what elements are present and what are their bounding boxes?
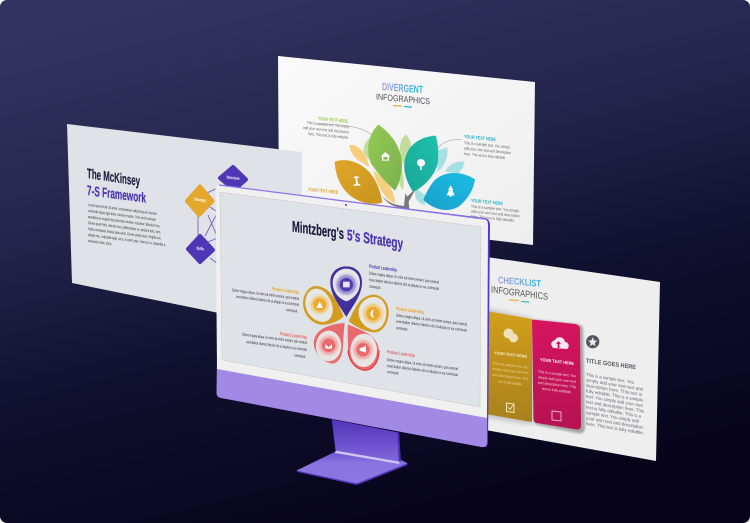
text block: right top: add your own text and description (464, 146, 511, 155)
petal: orange right (349, 295, 389, 332)
monitor bezel (216, 185, 488, 418)
text block: sample description: text. You simply add your own (586, 394, 643, 408)
heading: Mintzberg's 5's Strategy (292, 219, 403, 253)
icon: Structure diamond: Structure (226, 175, 240, 181)
text block: purple leadership (369, 264, 439, 291)
text block: red right leadership (387, 349, 458, 377)
framework connector lines (198, 186, 222, 267)
heading: The McKinsey 7-S Framework: The McKinsey (87, 165, 140, 189)
text block: right top: This is a sample text. You simply (464, 140, 510, 150)
heading: checklist infographics: INFOGRAPHICS (491, 285, 548, 303)
icon: checked box (506, 403, 514, 412)
text block: description: Donec quam felis, ultricies nec, pellentesque eu, pretium quis, sem. (88, 220, 161, 234)
monitor stand (297, 419, 407, 485)
heading: checklist infographics: CHECKLIST (498, 275, 541, 290)
text block: right bottom: add your own text and description (471, 209, 520, 218)
heading: checklist infographics (491, 275, 548, 303)
stand foot (297, 452, 407, 484)
text block: description (88, 202, 166, 247)
text block: red left leadership: Dolore magna aliqua. Ut enim ad minim veniam, quis nostrud (242, 332, 307, 345)
card text: YOUR TEXT HERE (494, 350, 527, 359)
chart: five strategy petals (303, 266, 389, 370)
panel: McKinsey 7-S framework slide (67, 124, 302, 330)
text block: right top: YOUR TEXT HERE (464, 134, 497, 143)
petal: orange left (303, 286, 344, 325)
text block: orange left leadership: consequat. (286, 307, 298, 313)
leaf: blue (423, 173, 475, 210)
text block: sample description: here. This text is fully editable. (586, 421, 644, 436)
text block: purple leadership: exercitation ullamco laboris nisi ut aliquip ex ea commodo (369, 277, 439, 291)
heading: The McKinsey 7-S Framework (87, 165, 146, 206)
text block: red right leadership: Dolore magna aliqua. Ut enim ad minim veniam, quis nostrud (387, 357, 458, 371)
text block: sample description: your own text and description (586, 416, 643, 430)
text block: right top (464, 134, 511, 160)
card text: text is fully editable. (498, 380, 523, 386)
text block: red right leadership: exercitation ullamco laboris nisi ut aliquip ex ea commodo (387, 363, 458, 377)
card text: text is fully editable. (542, 387, 572, 394)
petal: purple top (330, 266, 362, 317)
text block: orange left leadership: Product Leadership (272, 286, 299, 296)
panel: divergent infographics slide (278, 56, 535, 245)
card text (538, 357, 576, 394)
icon: star badge (586, 335, 599, 348)
text block: sample description: text is fully editable. This is a (586, 405, 641, 419)
text block: left top (303, 116, 349, 140)
icon: palm (353, 176, 361, 186)
text block: sample description: fully editable. This is a sample (586, 388, 643, 403)
monitor side edge (236, 187, 490, 447)
card text: and description here. This (492, 373, 529, 381)
text block: left top: here. This text is fully editable. (308, 131, 349, 140)
text block: left top: add your own text and description (303, 125, 349, 134)
card text: simply add your own text (492, 367, 528, 375)
icon: Skills diamond (188, 236, 213, 262)
text block: description: Nulla consequat massa quis enim. Donec pede justo, fringilla vel, (88, 226, 161, 240)
text block: left top: YOUR TEXT HERE (318, 116, 349, 125)
icon: Strategy diamond: Strategy (194, 197, 206, 203)
monitor screen (220, 192, 481, 407)
petal: red left (314, 323, 345, 364)
monitor (216, 185, 490, 447)
text block: sample description: description here. This text is (586, 383, 643, 397)
text block: orange right leadership: consequat. (396, 325, 408, 332)
heading underline (393, 106, 412, 107)
text block: sample description: This is a sample text. You (586, 372, 634, 385)
text block: orange right leadership: Dolore magna aliqua. Ut enim ad minim veniam, quis nostrud (396, 313, 467, 327)
text block: orange right leadership (396, 306, 467, 333)
stand neck (332, 419, 401, 462)
text block: right top: here. This text is fully editable. (464, 151, 506, 160)
text block: left bottom: YOUR TEXT HERE (308, 187, 338, 196)
callout lines (317, 124, 462, 148)
heading: Mintzberg's 5's Strategy: 5's Strategy (347, 227, 403, 253)
text block: right bottom: This is a sample text. You simply (471, 204, 519, 213)
text block: description: venenatis vitae, justo. (88, 238, 112, 246)
leaf: teal (404, 136, 438, 192)
heading: divergent infographics: DIVERGENT (382, 81, 423, 96)
icon: house (381, 152, 390, 161)
heading: Mintzberg's 5's Strategy: Mintzberg's (292, 219, 344, 243)
icon: empty box (552, 411, 561, 421)
heading: divergent infographics: INFOGRAPHICS (376, 92, 430, 106)
text block: red left leadership: Product Leadership (280, 331, 307, 341)
icon: chat bubbles (504, 328, 518, 342)
panel: checklist infographics slide (480, 256, 660, 461)
card: yellow (482, 308, 532, 424)
icon: Strategy diamond (187, 186, 212, 215)
text block: right bottom: YOUR TEXT HERE (471, 198, 504, 207)
card: pink (532, 320, 585, 434)
text block: red left leadership: exercitation ullamco laboris nisi ut aliquip ex ea commodo (246, 339, 307, 352)
icon: cloud upload (551, 337, 569, 349)
text block: right bottom: here. This text is fully editable. (471, 214, 515, 223)
heading underline (509, 300, 529, 302)
text block: description: Lorem ipsum dolor sit amet, consectetuer adipiscing elit. Aenean (88, 202, 157, 216)
text block: right bottom (471, 198, 520, 223)
text block: description: aliquet nec, vulputate eget, arcu. In enim justo, rhoncus ut, imperdiet a, (88, 232, 166, 247)
card text: and description here. This (538, 381, 576, 389)
card text: This is a sample text. You (492, 361, 528, 370)
card text: This is a sample text. You (538, 370, 576, 378)
text block: orange left leadership: exercitation ullamco laboris nisi ut aliquip ex ea commodo (236, 294, 299, 307)
icon: pine (447, 185, 455, 197)
text block: red left leadership: consequat. (294, 352, 306, 359)
heading: divergent infographics (376, 81, 430, 106)
text block: red left leadership (242, 331, 307, 359)
card text (492, 350, 529, 386)
icon: tree (417, 159, 425, 170)
text block: sample description: text and description here. This (586, 399, 645, 414)
heading: The McKinsey 7-S Framework: 7-S Framework (87, 182, 146, 206)
petal: red right (348, 324, 379, 370)
card text: simply add your own text (538, 375, 576, 384)
text block: orange left leadership: Dolore magna aliqua. Ut enim ad minim veniam, quis nostrud (232, 287, 299, 301)
text block: purple leadership: consequat. (369, 284, 381, 290)
heading: title goes here: TITLE GOES HERE (586, 358, 636, 371)
text block: purple leadership: Dolore magna aliqua. Ut enim ad minim veniam, quis nostrud (369, 271, 439, 285)
text block: red right leadership: Product Leadership (387, 349, 415, 359)
text block: description: penatibus et magnis dis parturient montes, nascetur ridiculus mus. (88, 214, 160, 228)
icon: Skills diamond: Skills (196, 246, 204, 251)
leaf: green (368, 125, 402, 191)
text block: purple leadership: Product Leadership (369, 264, 397, 274)
text block: orange right leadership: Product Leadership (396, 306, 424, 316)
text block: red right leadership: consequat. (387, 369, 399, 376)
text block: sample description (586, 372, 645, 436)
text block: description: commodo ligula eget dolor. Aenean massa. Cum sociis natoque (88, 208, 156, 222)
text block: sample description: simply add your own text and (586, 377, 643, 392)
camera dot (345, 204, 347, 206)
text block: sample description: sample text. You simply add (586, 410, 639, 424)
leaf: orange (335, 160, 382, 204)
card text: YOUR TEXT HERE (540, 357, 574, 366)
chart: divergent leaves (317, 124, 475, 210)
trunk (382, 191, 414, 209)
text block: orange left leadership (232, 286, 299, 313)
text block: orange right leadership: exercitation ullamco laboris nisi ut aliquip ex ea commodo (396, 319, 467, 333)
text block: left top: This is a sample text. You simply (307, 120, 349, 129)
monitor chin (216, 360, 487, 447)
icon: Structure diamond (220, 167, 246, 190)
